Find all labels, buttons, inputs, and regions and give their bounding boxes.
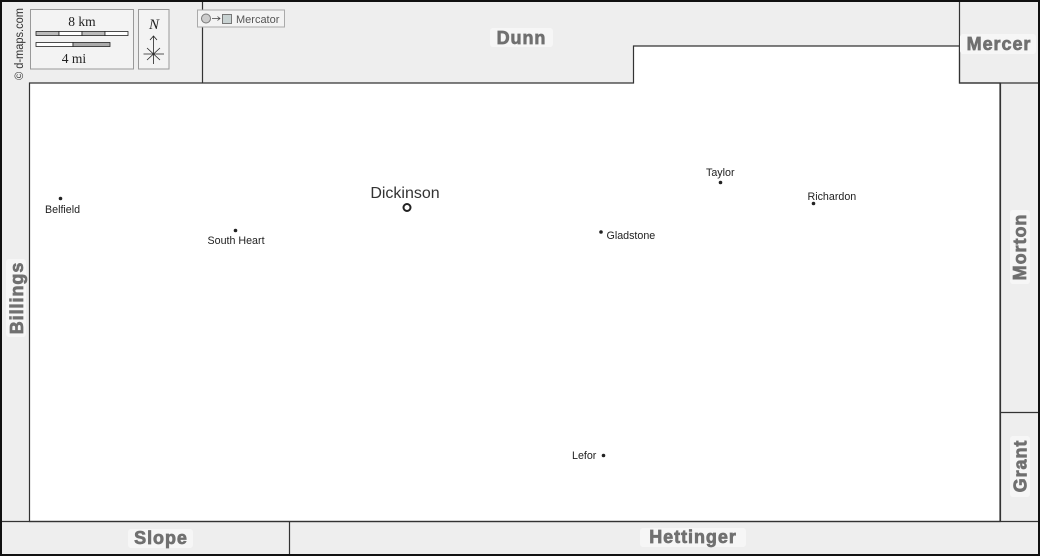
scale label: km: 8 km xyxy=(68,14,96,29)
city: Taylor xyxy=(706,167,735,184)
city: Richardon: Richardon xyxy=(808,191,856,203)
icon: circle to square xyxy=(202,14,232,24)
label: Billings: Billings xyxy=(7,262,27,334)
label: Morton: Morton xyxy=(1010,214,1030,280)
letter N: N xyxy=(148,17,160,33)
city: Lefor: Lefor xyxy=(572,450,597,462)
north arrow box xyxy=(138,10,169,69)
label: Grant: Grant xyxy=(1010,440,1030,492)
city: Taylor: Taylor xyxy=(706,167,735,179)
city: Dickinson xyxy=(370,185,440,211)
label: Hettinger: Hettinger xyxy=(649,527,737,547)
city: Dickinson: Dickinson xyxy=(370,185,440,202)
city: Gladstone: Gladstone xyxy=(606,230,655,242)
mile scale bar xyxy=(36,42,110,46)
city: South Heart xyxy=(208,229,265,247)
icon: compass arrow xyxy=(144,36,164,64)
panel: Stark county area xyxy=(30,46,1000,522)
credit: d-maps: © d-maps.com xyxy=(14,8,26,80)
projection name: Mercator xyxy=(236,14,280,26)
km scale bar xyxy=(36,32,128,36)
city: Belfield xyxy=(45,197,80,216)
label: Mercer: Mercer xyxy=(967,34,1031,54)
label: Dunn: Dunn xyxy=(497,28,546,48)
city: South Heart: South Heart xyxy=(208,235,265,247)
scale box xyxy=(30,10,134,69)
label: Slope: Slope xyxy=(134,528,188,548)
scale label: mi: 4 mi xyxy=(62,51,86,66)
city: Belfield: Belfield xyxy=(45,204,80,216)
projection badge: Mercator xyxy=(198,10,284,27)
